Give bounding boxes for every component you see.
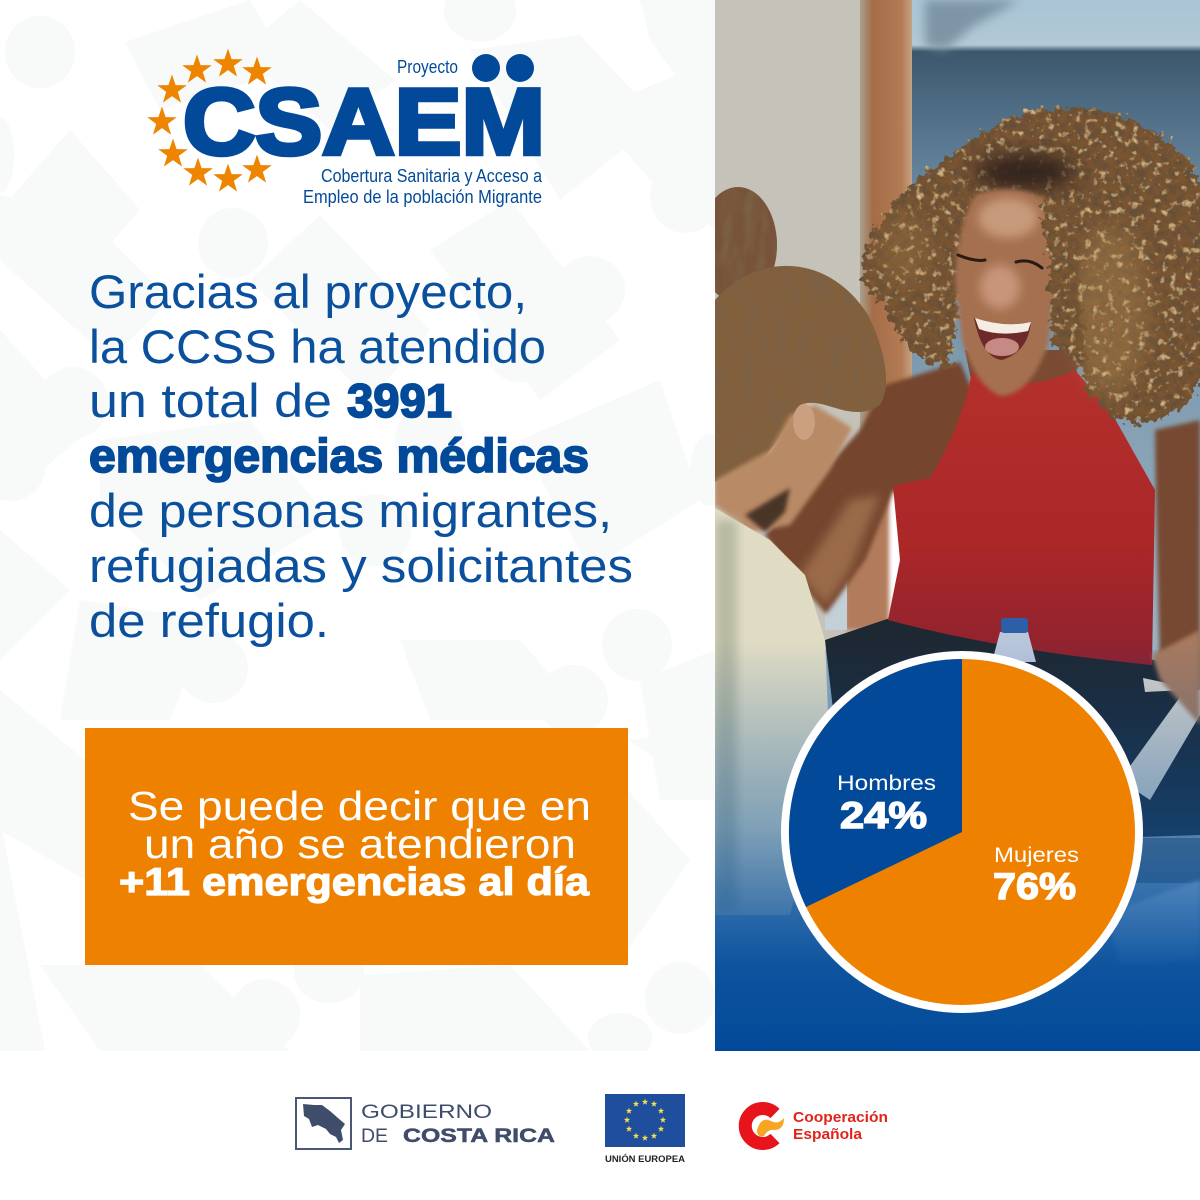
red top xyxy=(888,370,1155,665)
label: hombres: Hombres xyxy=(837,772,936,795)
logo: Cooperación Española xyxy=(745,1108,888,1144)
woman face xyxy=(955,189,1058,396)
man face and neck xyxy=(715,405,852,532)
logo dots xyxy=(472,54,534,82)
teeth xyxy=(975,318,1031,334)
value: 76%: 76% xyxy=(993,866,1076,907)
main statement text xyxy=(89,265,633,647)
icon: EU stars xyxy=(624,1099,666,1141)
pie slice: hombres xyxy=(789,659,962,907)
icon: red C xyxy=(745,1108,775,1144)
gold highlight curls xyxy=(879,210,1148,395)
logo subtitle line 2: Empleo de la población Migrante xyxy=(303,186,542,207)
forehead light xyxy=(978,198,1038,238)
cheeks and nose light xyxy=(980,265,1020,309)
icon: yellow wave xyxy=(757,1118,784,1136)
woman arm left xyxy=(765,362,985,614)
pie chart: hombres y mujeres xyxy=(781,651,1143,1013)
main statement text: un total de xyxy=(89,374,332,427)
hair over right of face xyxy=(1040,195,1085,365)
blurred tree xyxy=(925,0,1020,50)
main statement text: de refugio. xyxy=(89,594,329,647)
man hair xyxy=(715,266,886,482)
logo: Unión Europea xyxy=(605,1094,685,1165)
value: 24%: 24% xyxy=(840,795,927,836)
icon: Costa Rica map xyxy=(303,1104,345,1143)
woman trousers xyxy=(825,618,1200,840)
photo backdrop: lower window xyxy=(825,581,847,630)
man bun xyxy=(715,187,777,296)
logo subtitle line 1: Cobertura Sanitaria y Acceso a xyxy=(321,165,543,186)
text: Costa Rica: COSTA RICA xyxy=(403,1125,555,1147)
logo stars xyxy=(147,48,272,192)
photo backdrop: wall xyxy=(715,0,865,660)
logo: Gobierno de Costa Rica xyxy=(296,1098,555,1149)
blue gradient overlay xyxy=(715,640,1200,1051)
sneaker xyxy=(1113,880,1200,948)
man shirt xyxy=(715,508,830,915)
photo: two people laughing xyxy=(699,0,1200,1051)
tablet xyxy=(1130,678,1200,800)
main statement text: la CCSS ha atendido xyxy=(89,320,546,373)
hair of woman xyxy=(862,108,1200,423)
main statement text: 3991 xyxy=(347,374,452,427)
photo backdrop: floor xyxy=(715,650,1200,968)
dark hair roots xyxy=(975,154,1075,190)
bench xyxy=(1136,838,1200,883)
text: Española: Española xyxy=(793,1126,863,1143)
eyes xyxy=(958,255,1042,268)
pie slice: mujeres xyxy=(789,659,1135,1005)
shirt shade xyxy=(715,520,737,910)
man beard xyxy=(745,488,790,532)
photo backdrop: wooden post xyxy=(860,0,912,480)
label: mujeres: Mujeres xyxy=(994,844,1079,867)
footer logos xyxy=(296,1094,888,1165)
logo: Proyecto CSAEM xyxy=(147,48,545,207)
text: Gobierno: GOBIERNO xyxy=(361,1101,492,1123)
man ear xyxy=(793,404,815,440)
text: De: DE xyxy=(361,1125,388,1147)
background pattern panel xyxy=(0,0,730,1063)
main statement text: de personas migrantes, xyxy=(89,484,612,537)
main statement text: refugiadas y solicitantes xyxy=(89,539,633,592)
woman arm right xyxy=(1155,420,1200,690)
photo backdrop: lower post xyxy=(845,470,889,630)
callout line 2: un año se atendieron xyxy=(144,821,576,867)
arm sunlit patch xyxy=(800,495,880,606)
main statement text: Gracias al proyecto, xyxy=(89,265,527,318)
callout line 3: +11 emergencias al día xyxy=(119,861,589,904)
tongue xyxy=(985,338,1019,356)
callout: daily emergencies xyxy=(85,728,628,965)
callout line 1: Se puede decir que en xyxy=(128,783,591,829)
water bottle xyxy=(992,618,1036,662)
logo wordmark: CSAEM xyxy=(183,69,545,174)
logo Proyecto: Proyecto xyxy=(397,57,458,77)
woman neck xyxy=(965,350,1077,383)
photo backdrop: window xyxy=(910,0,1200,660)
text: Cooperación: Cooperación xyxy=(793,1109,888,1126)
mouth xyxy=(974,318,1031,360)
main statement text: emergencias médicas xyxy=(89,429,589,482)
hand xyxy=(1152,630,1200,725)
text: Unión Europea: UNIÓN EUROPEA xyxy=(605,1153,685,1165)
